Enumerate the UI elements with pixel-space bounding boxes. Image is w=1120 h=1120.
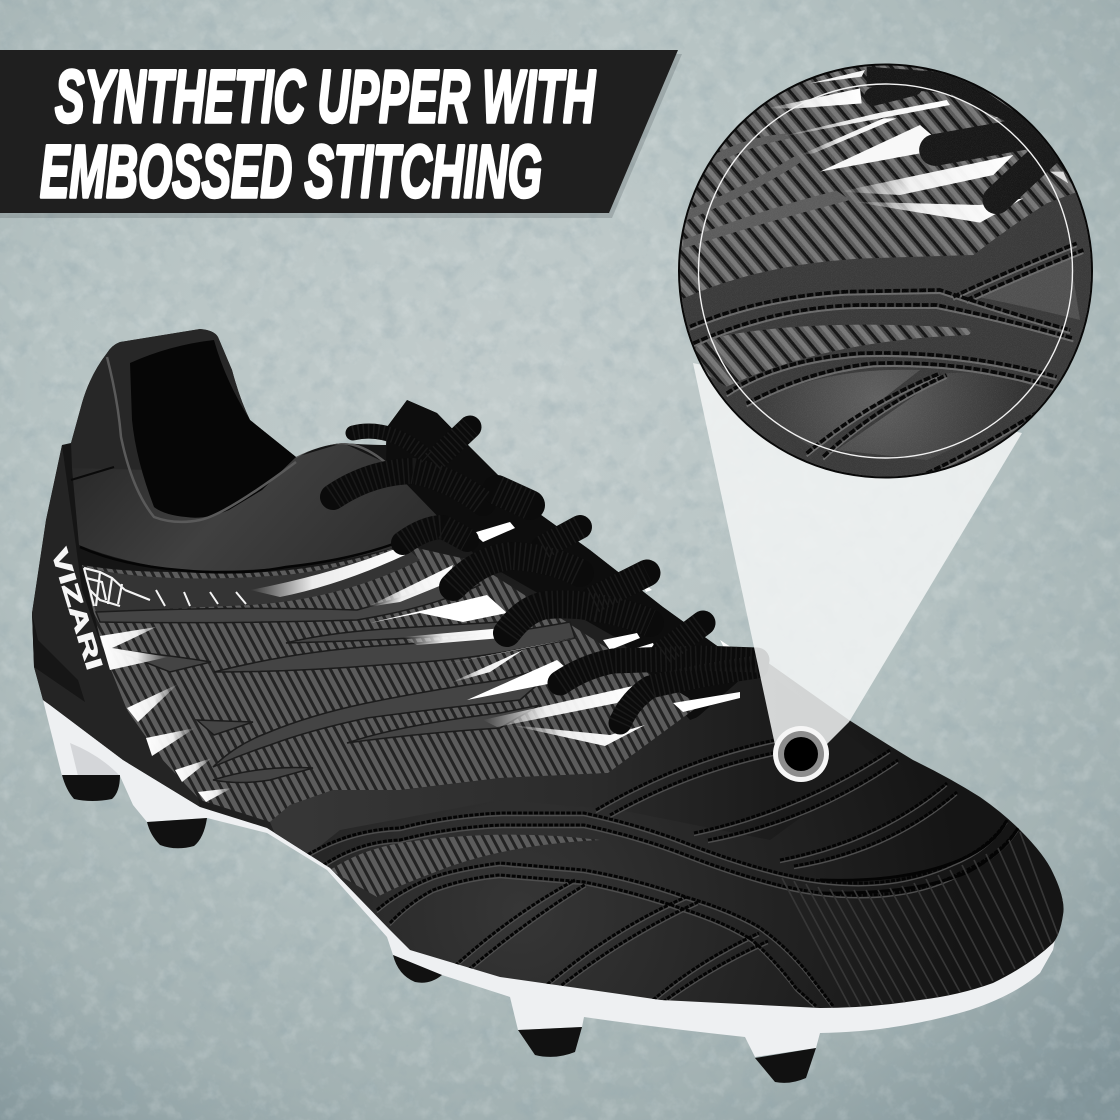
collar opening: [130, 340, 296, 518]
close-up stitched seams: [690, 243, 1083, 476]
toe seam lines: [820, 820, 1018, 893]
heading: line one: SYNTHETIC UPPER WITH: [55, 55, 596, 138]
close-up lower ribbed wedge: [693, 325, 971, 387]
tongue and eyelet strip: [386, 400, 770, 720]
inner highlight ring: [698, 84, 1072, 458]
close-up laces: [873, 87, 1050, 200]
collar rim: [107, 357, 386, 522]
smooth bands across panel: [96, 575, 575, 782]
heading: line two: EMBOSSED STITCHING: [40, 130, 542, 213]
forefoot stitching: [273, 740, 1018, 1009]
football boot: [32, 329, 1064, 1083]
sole and heel posts: [43, 700, 1063, 1057]
hotspot marker: [773, 726, 829, 782]
close-up leather panels: [782, 370, 920, 450]
heel tab: [71, 329, 296, 470]
laces: [333, 427, 757, 723]
textured side panel: [82, 545, 700, 822]
toe ribbing: [782, 832, 1058, 1007]
big smooth band under panel: [270, 678, 764, 855]
callout beam: [693, 363, 1022, 745]
white streaks: [100, 522, 740, 802]
close-up dark lace area: [866, 66, 1032, 127]
heel tab seam: [71, 467, 114, 480]
upper silhouette: [32, 329, 1064, 1008]
close-up texture: [680, 66, 1091, 476]
collar panel: [72, 444, 436, 571]
close-up smooth bands: [680, 133, 850, 248]
heel counter: [32, 445, 200, 807]
collar seam line: [80, 543, 396, 572]
close-up leather area: [682, 192, 1091, 476]
magnifier circle: stitching detail: [678, 64, 1093, 478]
close-up white streaks: [767, 70, 1068, 223]
cleats: [62, 775, 816, 1083]
ribbed heel detail: [32, 613, 85, 702]
close-up ribbed panel: [680, 66, 1091, 476]
upper smooth band: [82, 552, 420, 612]
clipped upper details: [32, 329, 1058, 1009]
sole shading: [70, 743, 120, 776]
ribbed wedge: [330, 835, 600, 897]
title banner: [0, 50, 682, 218]
white logo mesh: [84, 568, 150, 606]
brand wordmark: VIZARI: [46, 545, 108, 673]
white heel dart marks: [156, 590, 246, 606]
